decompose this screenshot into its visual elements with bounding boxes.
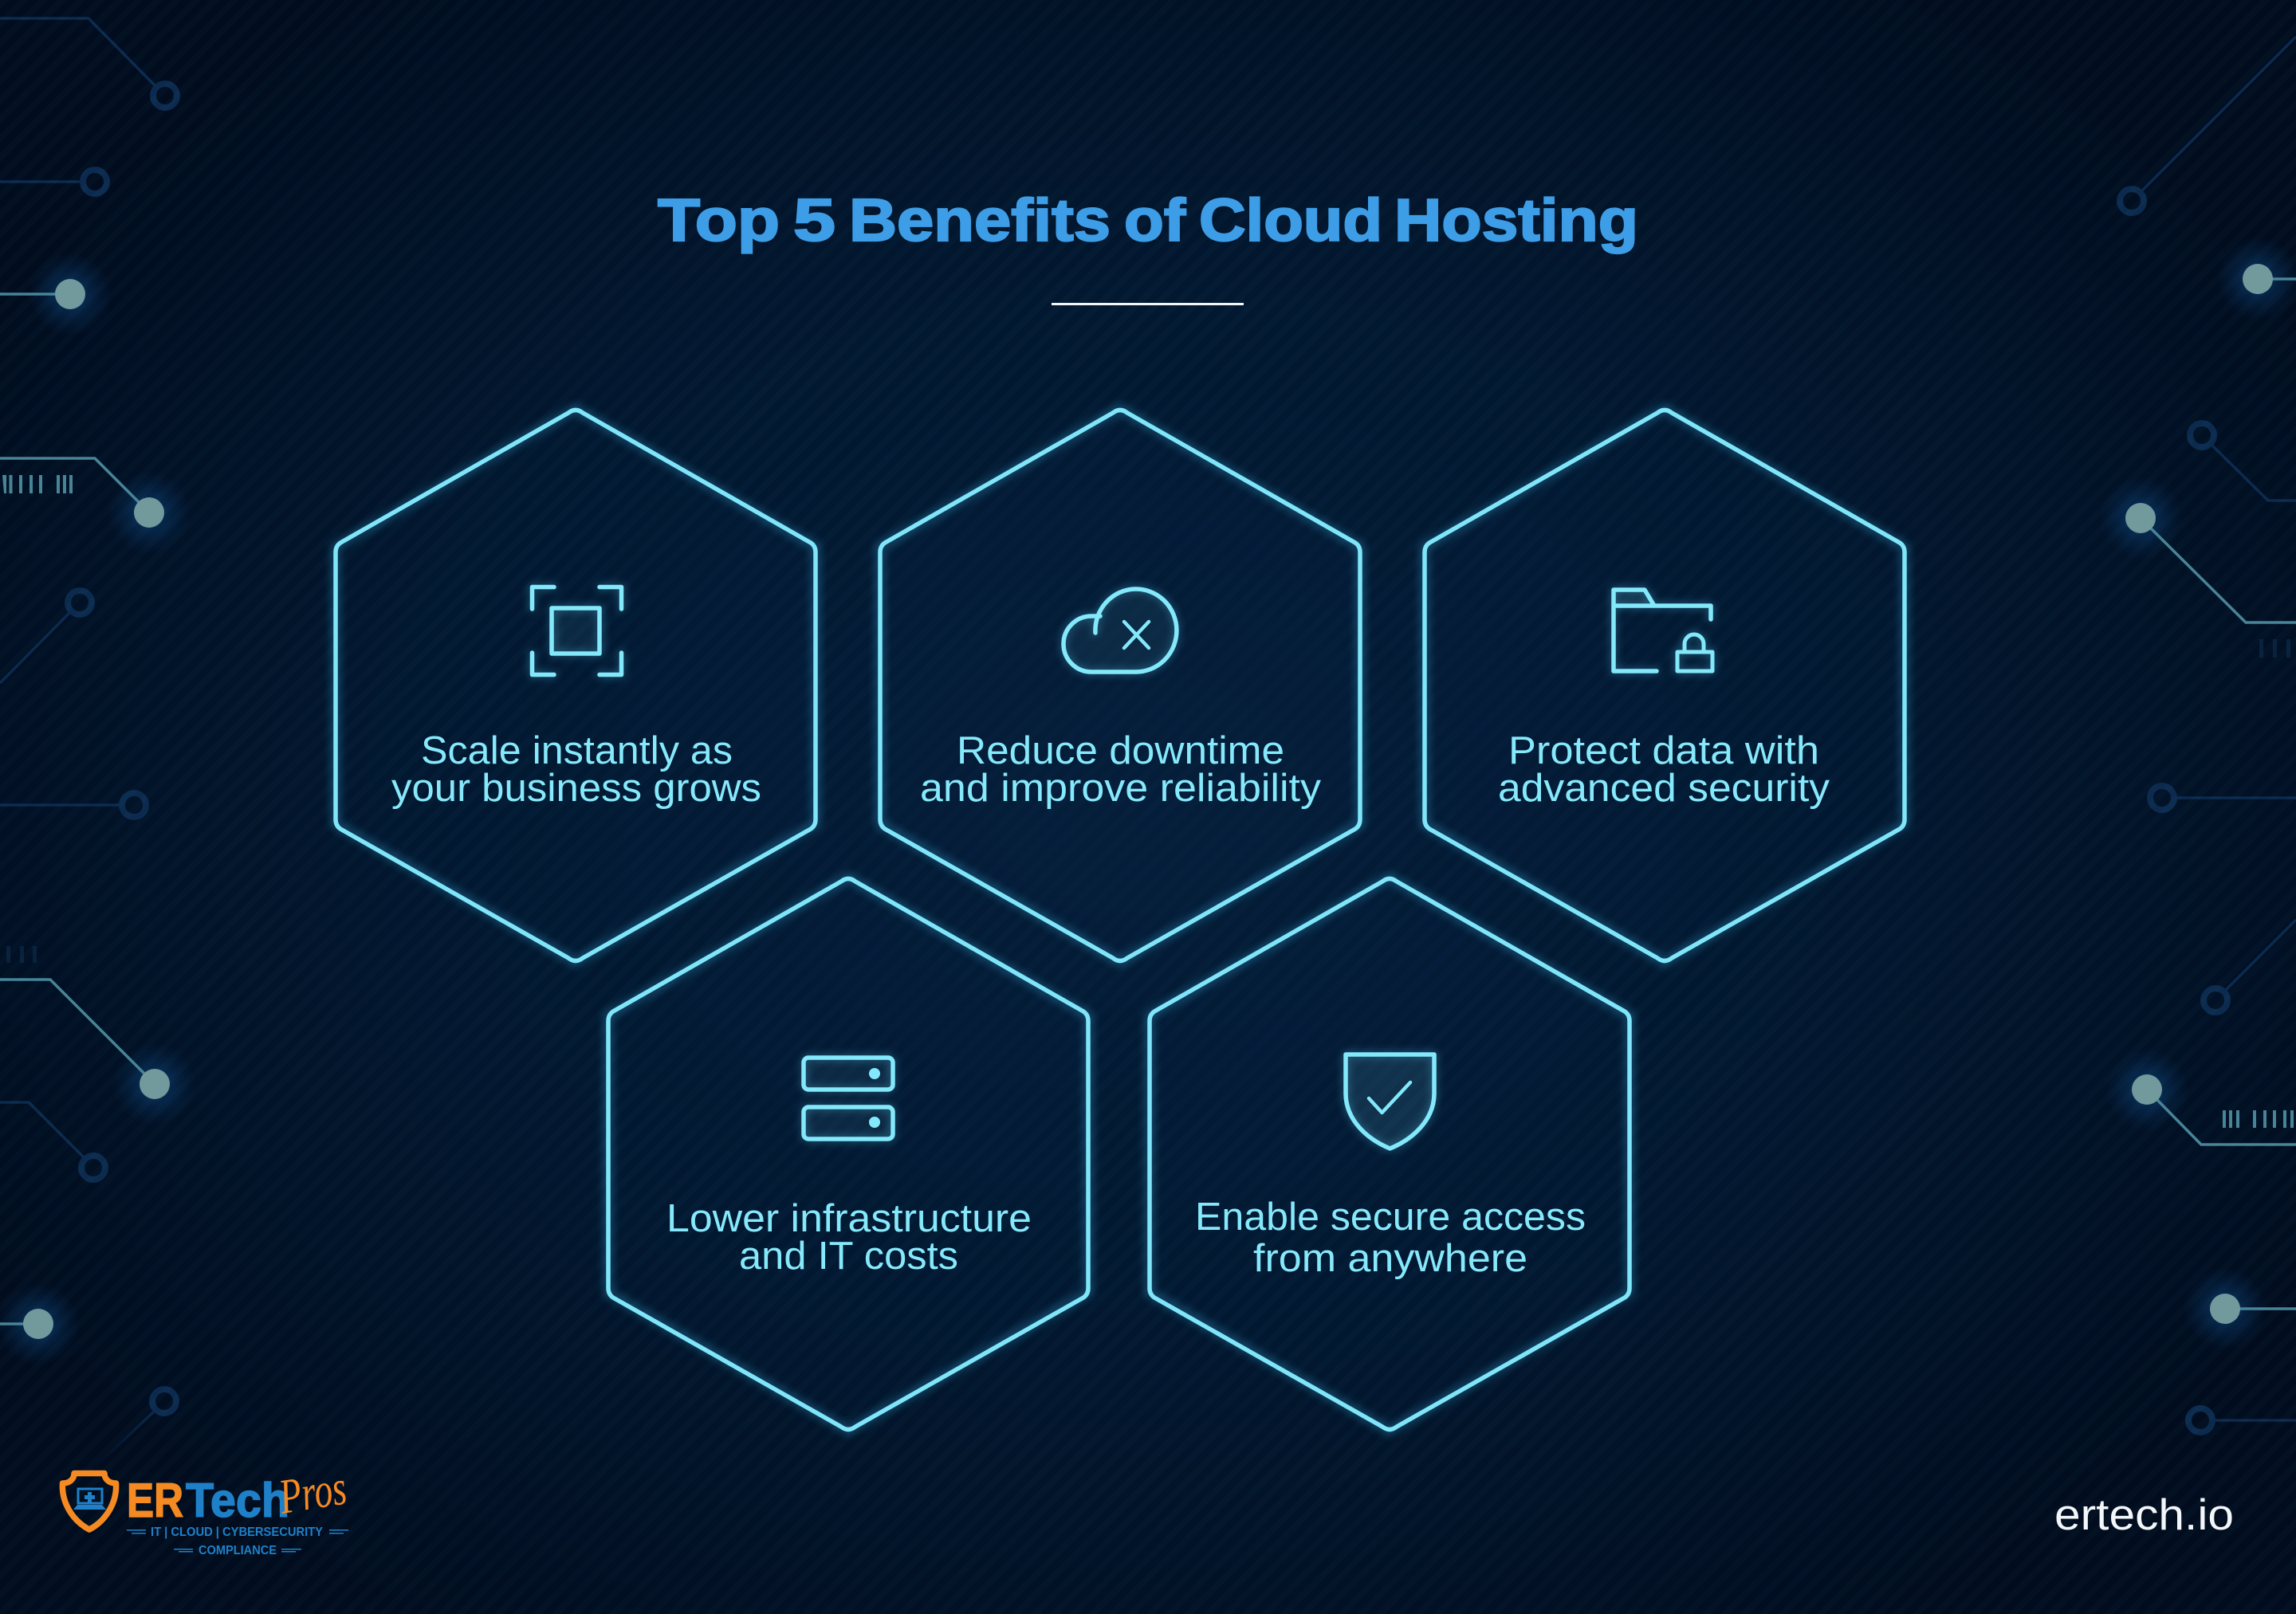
icon: expand frame (533, 587, 622, 674)
title: of (1124, 187, 1186, 253)
title divider (1052, 303, 1244, 305)
label: scale instantly (391, 729, 761, 810)
label: secure access: from anywhere (1253, 1237, 1527, 1280)
label: secure access: Enable secure access (1195, 1196, 1586, 1239)
logo wordmark: Tech (186, 1474, 289, 1527)
circuit traces: left side (0, 18, 196, 1467)
label: scale instantly: Scale instantly as (421, 729, 733, 772)
label: lower costs (666, 1197, 1032, 1278)
logo: ERTech Pros (62, 1461, 350, 1557)
title (658, 187, 1638, 253)
website url: ertech.io (2054, 1490, 2234, 1539)
label: reduce downtime (920, 729, 1322, 810)
title: Hosting (1394, 187, 1638, 253)
icon: logo shield (62, 1473, 116, 1530)
title: Cloud (1199, 187, 1382, 253)
title: Top (658, 187, 780, 253)
logo tagline: IT | CLOUD | CYBERSECURITY (151, 1526, 324, 1539)
label: scale instantly: your business grows (391, 767, 761, 810)
label: protect data: advanced security (1498, 767, 1830, 810)
label: reduce downtime: Reduce downtime (957, 729, 1284, 772)
label: protect data (1498, 729, 1830, 810)
label: reduce downtime: and improve reliability (920, 767, 1322, 810)
panel: protect data (1425, 409, 1905, 962)
logo tagline: COMPLIANCE (199, 1544, 277, 1557)
logo wordmark: ER (127, 1474, 183, 1527)
logo script: Pros: Pros (275, 1461, 350, 1525)
circuit traces: right side (2099, 37, 2296, 1432)
label: protect data: Protect data with (1508, 729, 1819, 772)
panel: scale instantly (336, 409, 816, 962)
label: lower costs: Lower infrastructure (666, 1197, 1032, 1240)
icon: cloud with x (1063, 589, 1177, 672)
logo tagline (127, 1526, 348, 1557)
panel: lower costs (608, 878, 1088, 1431)
icon: server stack (804, 1058, 893, 1139)
panel: secure access (1150, 878, 1630, 1431)
panel: reduce downtime (880, 409, 1360, 962)
label: secure access (1195, 1196, 1586, 1280)
title: Benefits (849, 187, 1111, 253)
title: 5 (793, 187, 835, 253)
icon: shield with check (1346, 1054, 1434, 1149)
icon: locked folder (1614, 590, 1712, 671)
logo wordmark (127, 1474, 289, 1527)
label: lower costs: and IT costs (739, 1235, 958, 1278)
